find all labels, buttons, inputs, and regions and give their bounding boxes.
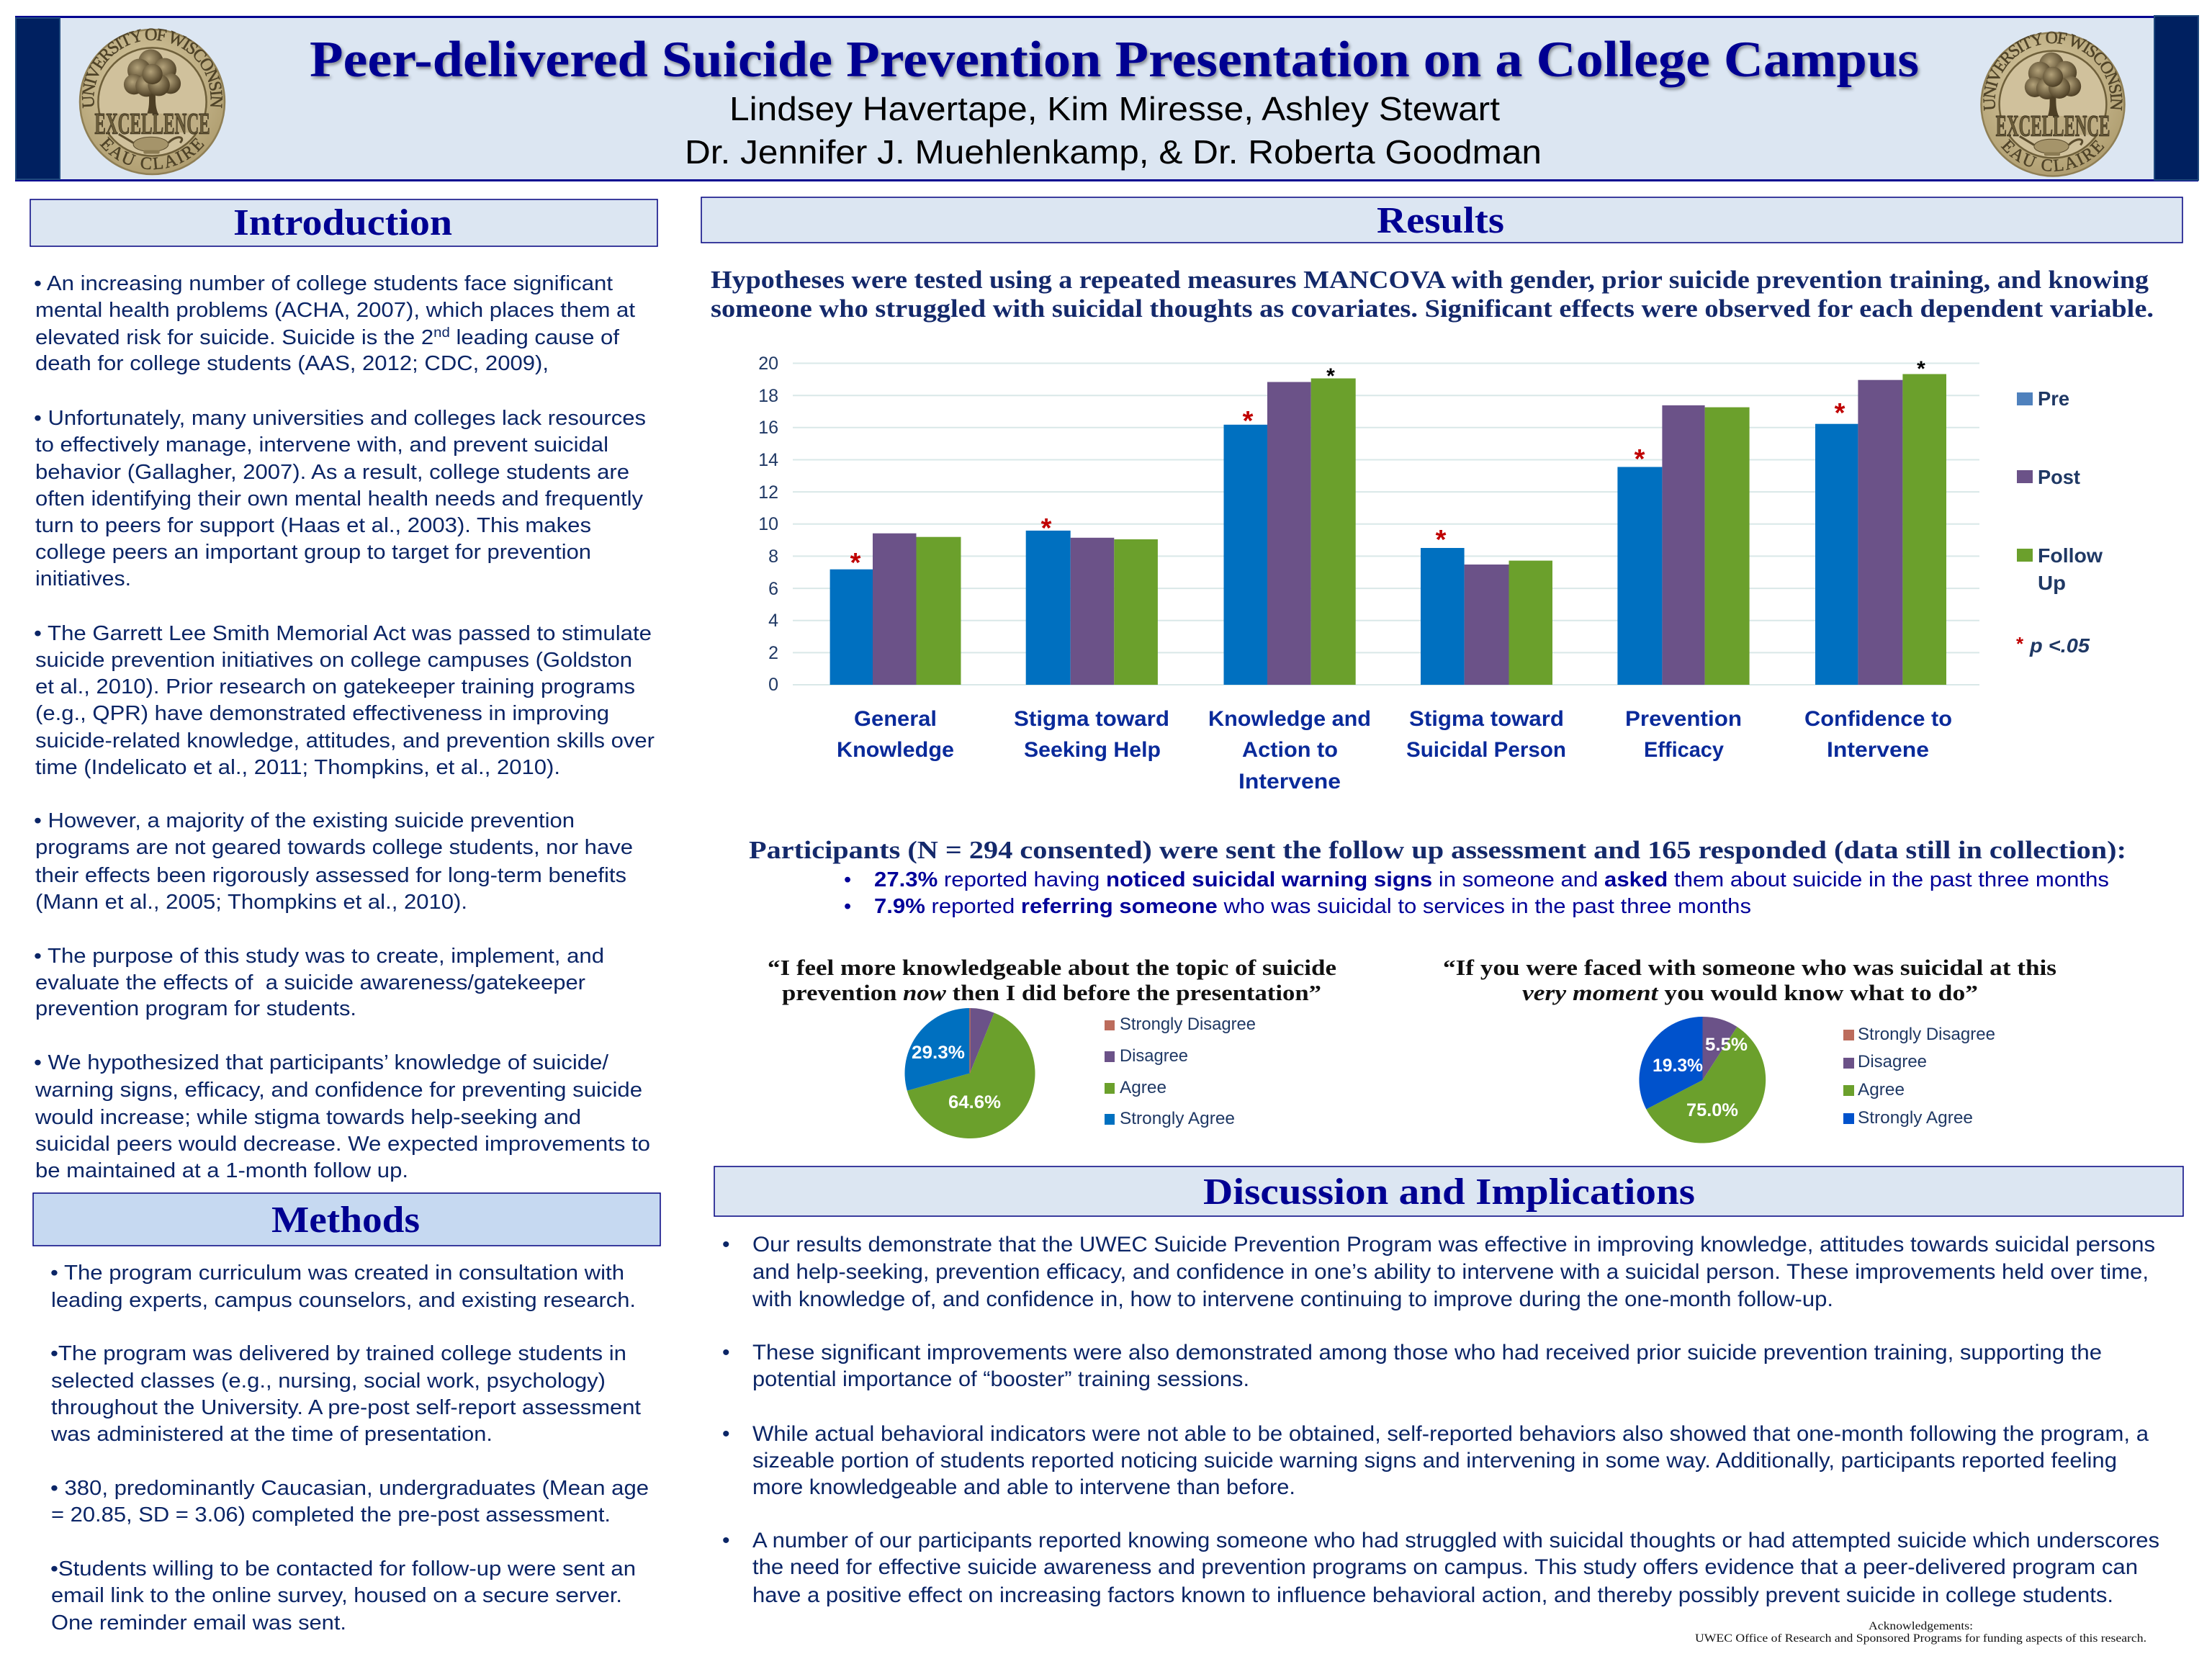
text block: introduction bullets: would increase; while stigma towards help-seeking and: [35, 1106, 581, 1129]
text block: discussion bullets: more knowledgeable and able to intervene than before.: [752, 1475, 1295, 1499]
text block: introduction bullets: [34, 272, 655, 1182]
y axis labels: 18: [758, 386, 778, 406]
significance asterisks: *: [1326, 364, 1335, 388]
heading: Results: Results: [1377, 200, 1504, 241]
text block: discussion bullets: and help-seeking, prevention efficacy, and confidence in one’s ability to intervene with a suicidal person. These improvements held over time,: [752, 1260, 2149, 1284]
chart legend: Up: [2038, 572, 2066, 594]
text block: introduction bullets: initiatives.: [35, 567, 131, 590]
text block: methods bullets: • 380, predominantly Caucasian, undergraduates (Mean age: [50, 1477, 649, 1500]
pie legend: left: Agree: [1120, 1078, 1166, 1097]
chart legend: p <.05: [2029, 634, 2090, 657]
panel: methods: [33, 1193, 660, 1635]
text block: hypotheses: Hypotheses were tested using a repeated measures MANCOVA with gender, prior suicide prevention training, and knowing: [711, 266, 2149, 294]
icon: right university seal: UNIVERSITY OF WISCONSIN: [1983, 32, 2123, 111]
pie chart: right: [1639, 1017, 1766, 1143]
bar chart: [758, 354, 2103, 793]
category labels: Action to: [1242, 738, 1338, 762]
chart legend: [2016, 387, 2103, 657]
icon: right university seal: [1980, 32, 2126, 177]
category labels: [837, 707, 1952, 793]
text block: discussion bullets: potential importance of “booster” training sessions.: [752, 1367, 1249, 1391]
pie chart: left: [905, 1008, 1035, 1138]
category labels: Stigma toward: [1409, 707, 1564, 731]
significance asterisks: [850, 357, 1925, 578]
text block: introduction bullets: • The purpose of this study was to create, implement, and: [34, 945, 604, 968]
panel: confidence pie chart: [1443, 955, 2056, 1143]
text block: introduction bullets: warning signs, efficacy, and confidence for preventing suicide: [35, 1079, 642, 1102]
text block: discussion bullets: •: [722, 1233, 730, 1256]
text block: introduction bullets: to effectively manage, intervene with, and prevent suicidal: [35, 433, 608, 457]
heading: Discussion and Implications: [714, 1166, 2183, 1216]
pie chart: right: 19.3%: [1653, 1056, 1703, 1076]
y axis labels: 8: [768, 547, 778, 567]
heading: Discussion and Implications: Discussion and Implications: [1203, 1172, 1695, 1213]
y axis labels: 4: [768, 611, 778, 631]
y axis labels: 0: [768, 675, 778, 695]
text block: methods bullets: leading experts, campus counselors, and existing research.: [51, 1289, 636, 1312]
pie legend: right: Strongly Disagree: [1858, 1025, 1995, 1044]
pie legend: left: Strongly Agree: [1120, 1109, 1235, 1128]
panel: introduction: [30, 199, 657, 1182]
quote: very moment: “If you were faced with someone who was suicidal at this: [1443, 955, 2056, 980]
text block: methods bullets: • The program curriculum was created in consultation with: [50, 1262, 624, 1285]
text block: discussion bullets: •: [722, 1529, 730, 1552]
significance asterisks: *: [1917, 357, 1925, 381]
pie chart: left: 64.6%: [948, 1092, 1001, 1112]
text block: introduction bullets: turn to peers for support (Haas et al., 2003). This makes: [35, 514, 591, 537]
bars: General Knowledge: [830, 534, 961, 685]
authors: [685, 90, 1542, 171]
icon: left university seal: EAU CLAIRE: [99, 137, 204, 170]
text block: introduction bullets: time (Indelicato et al., 2011; Thompkins, et al., 2010).: [35, 756, 560, 779]
text block: introduction bullets: (e.g., QPR) have demonstrated effectiveness in improving: [35, 702, 609, 725]
heading: Results: [701, 197, 2182, 243]
authors: Dr. Jennifer J. Muehlenkamp, & Dr. Roberta Goodman: [685, 133, 1542, 171]
text block: methods bullets: •Students willing to be contacted for follow-up were sent an: [50, 1557, 636, 1581]
text block: methods bullets: = 20.85, SD = 3.06) completed the pre-post assessment.: [51, 1503, 611, 1527]
category labels: Intervene: [1238, 770, 1341, 793]
text block: introduction bullets: be maintained at a 1-month follow up.: [35, 1159, 408, 1182]
category labels: Intervene: [1827, 738, 1929, 762]
text block: introduction bullets: leading cause of: [450, 326, 620, 349]
acknowledgements: UWEC Office of Research and Sponsored Programs for funding aspects of this research.: [1695, 1632, 2146, 1645]
text block: discussion bullets: These significant improvements were also demonstrated among those who had received prior suicide prevention training, supporting the: [752, 1341, 2102, 1364]
significance asterisks: *: [850, 548, 861, 578]
title: Peer-delivered Suicide Prevention Presentation on a College Campus: [310, 32, 1919, 88]
pie chart: left: 29.3%: [912, 1043, 965, 1063]
text block: introduction bullets: • However, a majority of the existing suicide prevention: [34, 809, 575, 832]
text block: discussion bullets: Our results demonstrate that the UWEC Suicide Prevention Program was effective in improving knowledge, attitudes towards suicidal persons: [752, 1233, 2155, 1256]
significance asterisks: *: [1243, 406, 1254, 436]
text block: discussion bullets: with knowledge of, and confidence in, how to intervene continuing to improve during the one-month follow-up.: [752, 1287, 1833, 1311]
text block: hypotheses: someone who struggled with suicidal thoughts as covariates. Significant effects were observed for each dependent variable.: [711, 295, 2154, 323]
pie legend: left: [1105, 1015, 1256, 1128]
text block: introduction bullets: behavior (Gallagher, 2007). As a result, college students are: [35, 461, 629, 484]
quote: very moment: very moment you would know what to do”: [1522, 980, 1978, 1005]
heading: Introduction: [30, 199, 657, 246]
bars: Knowledge and Action to Intervene: [1224, 379, 1356, 685]
quote: knowledgeable: [768, 955, 1336, 1005]
text block: hypotheses: [711, 266, 2154, 323]
y axis labels: [758, 354, 778, 695]
heading: Introduction: Introduction: [233, 202, 452, 243]
pie chart: right: 75.0%: [1686, 1100, 1738, 1120]
text block: methods bullets: throughout the University. A pre-post self-report assessment: [51, 1396, 641, 1419]
significance asterisks: *: [1041, 513, 1052, 544]
icon: right university seal: EAU CLAIRE: [2000, 138, 2105, 171]
pie chart: right: 5.5%: [1705, 1035, 1748, 1055]
y axis labels: 20: [758, 354, 778, 374]
panel: results: [701, 197, 2183, 1645]
text block: discussion bullets: sizeable portion of students reported noticing suicide warning signs and intervening in some way. Additionally, participants reported feeling: [752, 1449, 2117, 1473]
pie legend: right: Agree: [1858, 1080, 1905, 1100]
acknowledgements: Acknowledgements:: [1869, 1620, 1973, 1632]
text block: introduction bullets: suicidal peers would decrease. We expected improvements to: [35, 1133, 650, 1156]
text block: participants: 27.3% reported having noticed suicidal warning signs in someone and asked them about suicide in the past three months: [874, 868, 2109, 891]
text block: introduction bullets: suicide prevention initiatives on college campuses (Goldston: [35, 649, 632, 672]
text block: discussion bullets: While actual behavioral indicators were not able to be obtained, self-reported behaviors also showed that one-month following the program, a: [752, 1422, 2149, 1446]
y axis labels: 10: [758, 514, 778, 534]
chart legend: Follow: [2038, 544, 2103, 567]
y axis labels: 6: [768, 579, 778, 599]
category labels: Knowledge: [837, 738, 954, 762]
panel: knowledge pie chart: [768, 955, 1336, 1138]
category labels: Efficacy: [1644, 738, 1724, 762]
bars: Stigma toward Seeking Help: [1026, 531, 1158, 685]
header banner: [15, 16, 2198, 181]
text block: introduction bullets: • An increasing number of college students face significant: [34, 272, 613, 295]
chart legend: Post: [2038, 466, 2080, 488]
text block: participants: [749, 836, 2126, 918]
pie legend: right: Disagree: [1858, 1052, 1927, 1071]
heading: Methods: Methods: [271, 1200, 420, 1241]
category labels: Stigma toward: [1014, 707, 1169, 731]
y axis labels: 16: [758, 418, 778, 438]
text block: methods bullets: selected classes (e.g., nursing, social work, psychology): [51, 1370, 606, 1393]
authors: Lindsey Havertape, Kim Miresse, Ashley Stewart: [729, 90, 1500, 127]
text block: methods bullets: One reminder email was sent.: [51, 1611, 346, 1635]
panel: discussion and implications: [714, 1166, 2183, 1607]
text block: introduction bullets: their effects been rigorously assessed for long-term benefits: [35, 864, 626, 887]
text block: introduction bullets: evaluate the effects of a suicide awareness/gatekeeper: [35, 971, 585, 994]
chart legend: *: [2016, 633, 2024, 655]
category labels: Seeking Help: [1024, 738, 1161, 762]
text block: methods bullets: [50, 1262, 649, 1635]
icon: right university seal: EXCELLENCE: [1996, 109, 2110, 143]
category labels: Prevention: [1625, 707, 1742, 731]
chart legend: Pre: [2038, 387, 2069, 410]
text block: discussion bullets: •: [722, 1341, 730, 1364]
text block: discussion bullets: A number of our participants reported knowing someone who had struggled with suicidal thoughts or had attempted suicide which underscores: [752, 1529, 2159, 1552]
text block: methods bullets: •The program was delivered by trained college students in: [50, 1342, 626, 1365]
text block: discussion bullets: •: [722, 1422, 730, 1446]
significance asterisks: *: [1835, 398, 1845, 428]
text block: introduction bullets: suicide-related knowledge, attitudes, and prevention skills over: [35, 729, 655, 752]
text block: discussion bullets: the need for effective suicide awareness and prevention programs on campus. This study offers evidence that a peer-delivered program can: [752, 1555, 2138, 1579]
text block: participants: •: [844, 895, 851, 918]
text block: methods bullets: email link to the online survey, housed on a secure server.: [51, 1584, 622, 1607]
text block: introduction bullets: nd: [433, 325, 450, 341]
text block: participants: •: [844, 868, 851, 891]
acknowledgements: [1695, 1620, 2146, 1645]
quote: very moment: [1443, 955, 2056, 1005]
text block: introduction bullets: • Unfortunately, many universities and colleges lack resources: [34, 407, 646, 430]
significance asterisks: *: [1635, 444, 1645, 475]
y axis labels: 14: [758, 450, 778, 470]
bars: Prevention Efficacy: [1617, 405, 1750, 685]
text block: introduction bullets: often identifying their own mental health needs and frequently: [35, 487, 644, 511]
left navy band: [16, 18, 60, 179]
text block: introduction bullets: et al., 2010). Prior research on gatekeeper training programs: [35, 675, 635, 698]
text block: introduction bullets: prevention program for students.: [35, 997, 356, 1020]
bars: Confidence to Intervene: [1815, 374, 1946, 685]
text block: discussion bullets: have a positive effect on increasing factors known to influence behavioral action, and thereby possibly prevent suicide in college students.: [752, 1583, 2113, 1607]
text block: introduction bullets: death for college students (AAS, 2012; CDC, 2009),: [35, 352, 549, 375]
text block: introduction bullets: elevated risk for suicide. Suicide is the 2: [35, 326, 407, 349]
right navy band: [2154, 16, 2198, 180]
icon: left university seal: [79, 28, 226, 176]
quote: knowledgeable: prevention now then I did before the presentation”: [782, 980, 1321, 1005]
bars: Stigma toward Suicidal Person: [1421, 548, 1552, 685]
text block: introduction bullets: (Mann et al., 2005; Thompkins et al., 2010).: [35, 891, 467, 914]
heading: Methods: [33, 1193, 660, 1246]
text block: introduction bullets: programs are not geared towards college students, nor have: [35, 836, 633, 859]
text block: introduction bullets: college peers an important group to target for prevention: [35, 541, 591, 564]
category labels: General: [854, 707, 937, 731]
pie legend: left: Strongly Disagree: [1120, 1015, 1256, 1034]
category labels: Confidence to: [1804, 707, 1952, 731]
pie legend: left: Disagree: [1120, 1046, 1188, 1066]
quote: knowledgeable: “I feel more knowledgeable about the topic of suicide: [768, 955, 1336, 980]
icon: left university seal: UNIVERSITY OF WISCONSIN: [82, 28, 223, 108]
text block: methods bullets: was administered at the time of presentation.: [50, 1423, 493, 1446]
text block: participants: Participants (N = 294 consented) were sent the follow up assessment and 165 responded (data still in collection):: [749, 836, 2126, 864]
text block: introduction bullets: • We hypothesized that participants’ knowledge of suicide/: [34, 1051, 609, 1074]
icon: left university seal: EXCELLENCE: [94, 107, 210, 141]
category labels: Suicidal Person: [1406, 738, 1566, 762]
pie legend: right: Strongly Agree: [1858, 1108, 1973, 1128]
text block: participants: 7.9% reported referring someone who was suicidal to services in the past three months: [874, 895, 1751, 918]
significance asterisks: *: [1436, 525, 1447, 555]
y axis labels: 2: [768, 643, 778, 663]
y axis labels: 12: [758, 482, 778, 503]
pie legend: right: [1843, 1025, 1995, 1128]
category labels: Knowledge and: [1208, 707, 1371, 731]
text block: introduction bullets: • The Garrett Lee Smith Memorial Act was passed to stimulate: [34, 622, 652, 645]
text block: discussion bullets: [722, 1233, 2159, 1607]
text block: introduction bullets: mental health problems (ACHA, 2007), which places them at: [35, 299, 635, 322]
